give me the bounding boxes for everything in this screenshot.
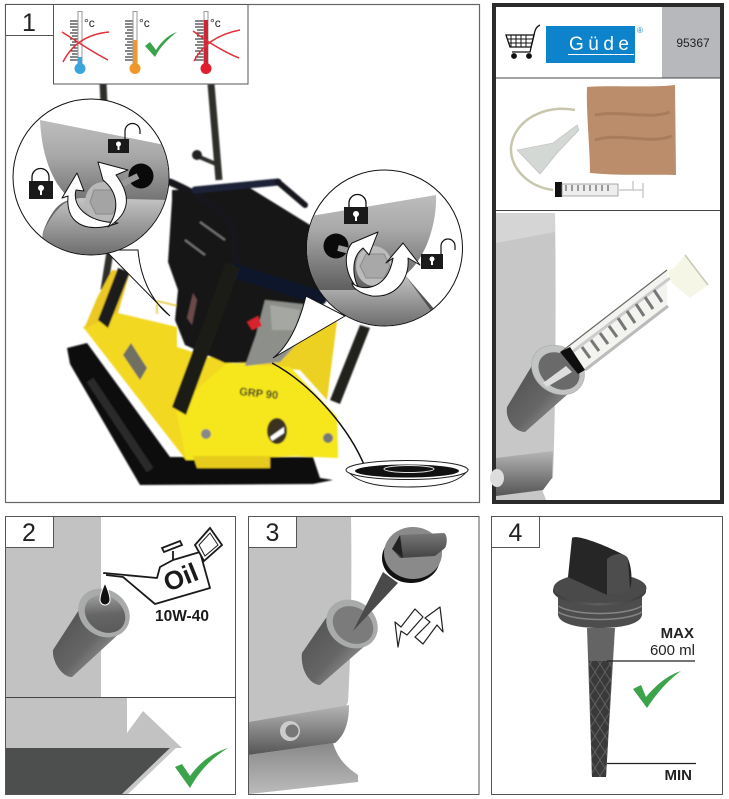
engine (168, 188, 325, 363)
base plate (67, 343, 333, 485)
lock: open (108, 124, 140, 153)
step number 2 (6, 516, 54, 548)
article number box: 95367 (676, 36, 710, 50)
support arms (172, 262, 240, 415)
sheet metal wall (6, 517, 101, 697)
filler tube (302, 590, 387, 685)
flange band (249, 705, 349, 755)
panel 2: fill oil (5, 516, 236, 794)
logo (546, 26, 643, 63)
dipstick (353, 527, 447, 631)
push-pull arrows (395, 607, 443, 647)
magnifier circle: left bolt (13, 99, 180, 260)
bolt (280, 721, 300, 741)
level side view (6, 698, 182, 794)
yellow rail (157, 301, 178, 314)
panel: spare parts info (490, 5, 722, 502)
panel 1: drain the oil (6, 4, 480, 502)
oil grade label: 10W-40 (155, 608, 209, 625)
dipstick detail (553, 537, 646, 777)
icon: shopping cart (506, 25, 540, 58)
large syringe (560, 255, 708, 374)
step number 3: 3 (266, 519, 279, 547)
logo: Güde (569, 34, 629, 55)
thermometer: too cold (62, 12, 109, 74)
MAX marker: 600 ml (650, 642, 695, 659)
logo: ® (637, 26, 643, 35)
thermometer: too hot: °c (210, 16, 221, 30)
filler tube (53, 579, 139, 677)
lock: open (421, 239, 455, 269)
side slot (267, 418, 287, 444)
thermometer: correct (125, 12, 177, 74)
cloth rag (587, 85, 676, 175)
GRP 90 lettering: GRP 90 (239, 386, 279, 402)
step number 1: 1 (22, 9, 36, 37)
oil drop (100, 583, 110, 605)
thermometer: too hot (193, 12, 240, 74)
rotation arrows (62, 162, 128, 228)
thermometer: too cold: °c (84, 16, 95, 30)
lock: closed (344, 194, 368, 224)
step number 1 (6, 4, 54, 37)
green check (633, 671, 681, 708)
fill hose (511, 109, 575, 190)
filler tube (507, 335, 594, 432)
engine frame tubes (170, 182, 320, 298)
step number 4: 4 (509, 519, 523, 547)
sheet metal wall (249, 517, 351, 725)
magnifier circle: right bolt (305, 170, 462, 330)
callout wedge: right (273, 296, 345, 358)
MIN marker: MIN (664, 767, 692, 784)
rear yellow panel (210, 303, 337, 400)
rear handle bars (103, 82, 219, 290)
panel 3: check dipstick (248, 516, 479, 794)
step number 2: 2 (22, 519, 36, 547)
MAX marker: MAX (661, 625, 694, 642)
yellow machine body (83, 313, 338, 460)
thermometer: correct: °c (139, 16, 150, 30)
temperature panel (54, 4, 248, 84)
green check (175, 748, 228, 788)
MIN marker (607, 764, 696, 784)
oil can icon (104, 528, 222, 604)
funnel (517, 125, 579, 174)
lock: closed (29, 168, 53, 199)
step number 4 (492, 516, 540, 548)
sheet metal wall (496, 213, 556, 500)
data plate (123, 343, 147, 380)
oil stream line (272, 363, 365, 467)
article number box (662, 7, 720, 78)
small syringe (555, 181, 643, 198)
panel 4: oil level (492, 516, 722, 794)
rotation arrows (346, 232, 420, 296)
callout wedge: left (105, 250, 170, 316)
compactor machine photo (67, 82, 370, 485)
step number 3 (248, 516, 296, 548)
Oil lettering: Oil (159, 557, 202, 598)
MAX marker (607, 625, 695, 661)
drain dish (346, 460, 468, 487)
